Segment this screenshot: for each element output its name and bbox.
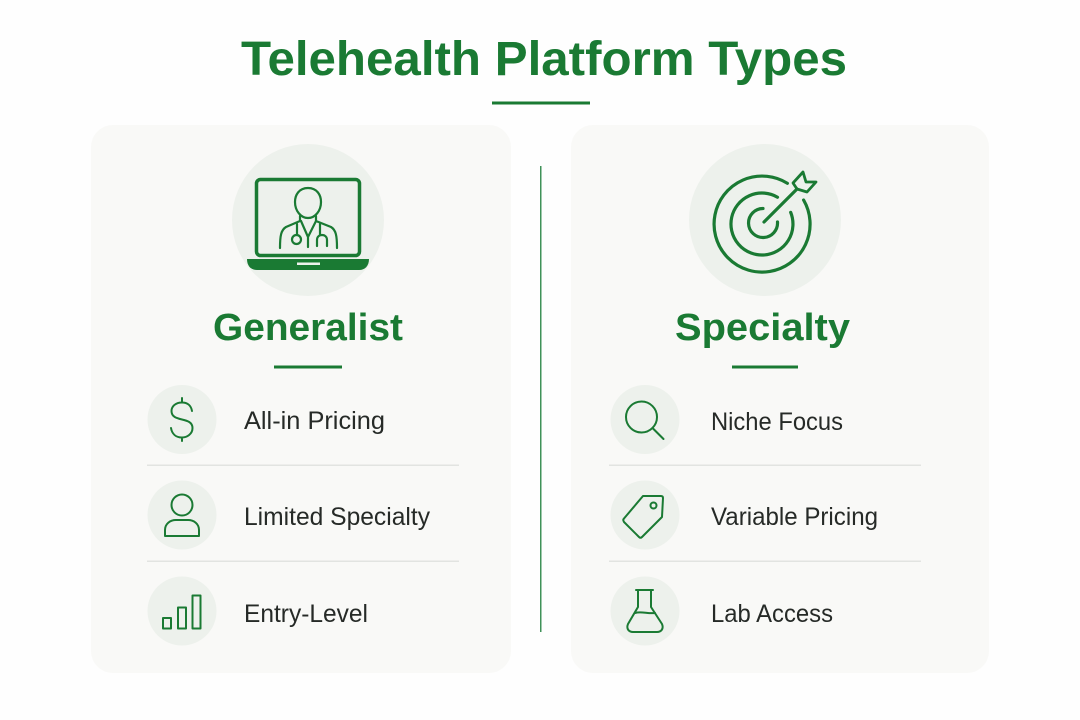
title: Telehealth Platform Types — [241, 33, 847, 86]
icon: target with arrow — [689, 144, 841, 296]
row: all-in pricing: All-in Pricing — [244, 407, 385, 435]
center divider — [540, 166, 542, 632]
row: limited specialty — [148, 480, 430, 550]
row: limited specialty: Limited Specialty — [244, 503, 430, 531]
row: niche focus: Niche Focus — [711, 408, 843, 436]
row: niche focus — [610, 385, 843, 454]
heading: specialty: Specialty — [675, 307, 850, 349]
row: all-in pricing — [148, 385, 385, 454]
panel: generalist — [91, 125, 511, 673]
row: lab access — [610, 576, 833, 646]
row: variable pricing — [610, 480, 878, 550]
panel: specialty — [571, 125, 989, 673]
icon: doctor on laptop — [232, 144, 384, 296]
heading: generalist: Generalist — [213, 307, 403, 349]
row: entry-level — [148, 576, 368, 646]
row: variable pricing: Variable Pricing — [711, 503, 878, 531]
row: entry-level: Entry-Level — [244, 600, 368, 628]
row: lab access: Lab Access — [711, 600, 833, 628]
